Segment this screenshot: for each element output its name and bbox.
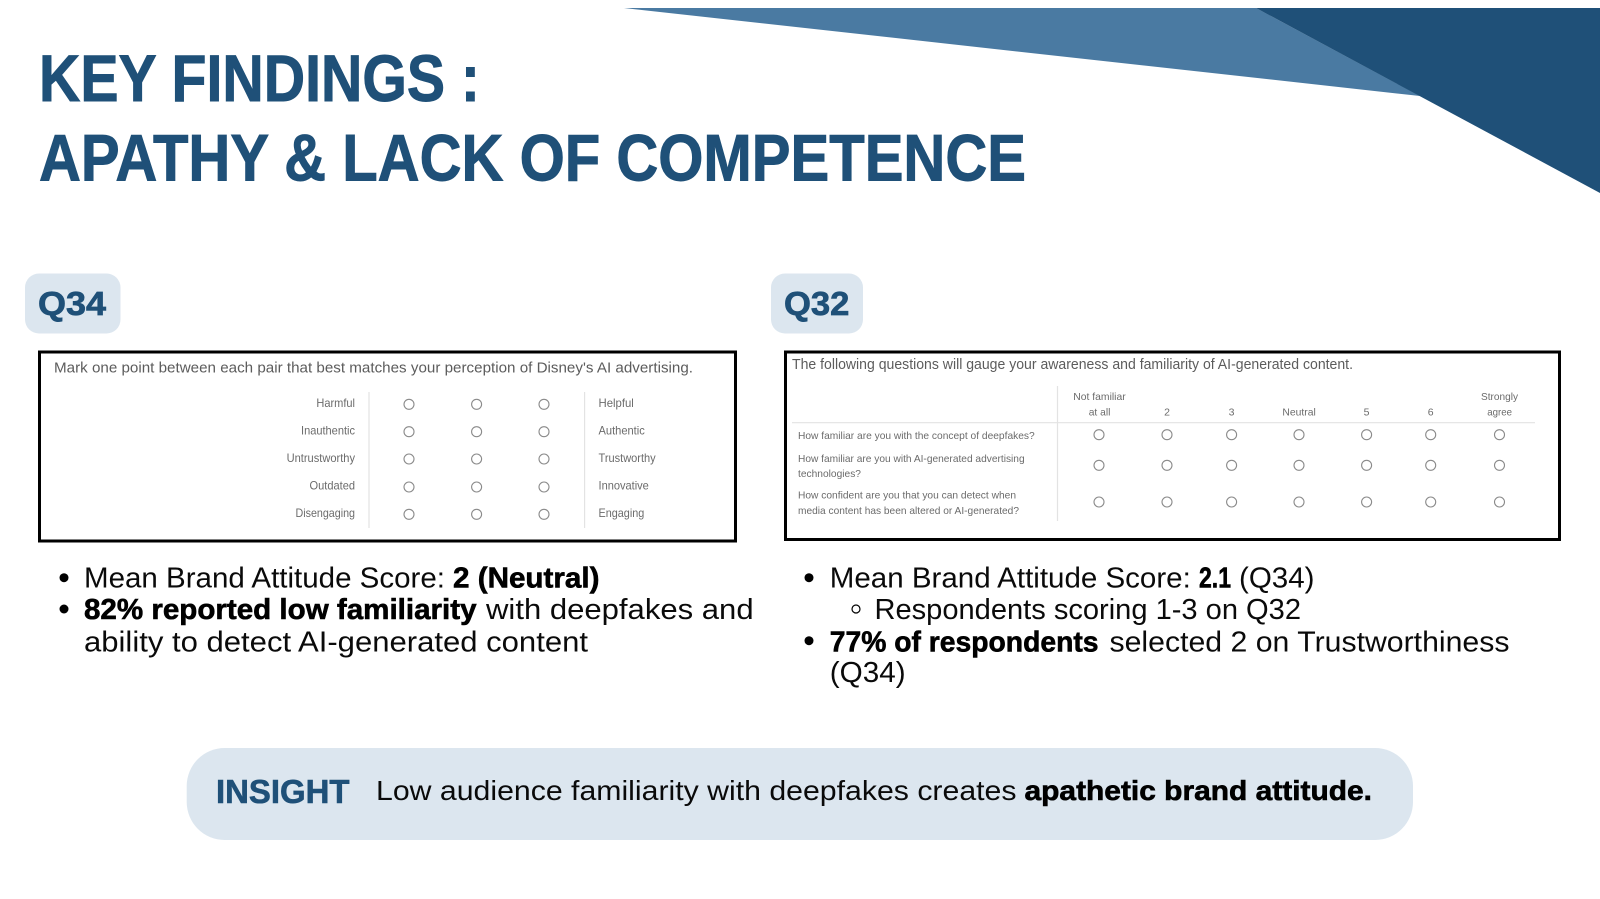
- survey screenshot: Q34 semantic scale: Engaging: [598, 506, 644, 520]
- survey screenshot: Q32 familiarity matrix: Strongly: [1481, 391, 1519, 403]
- findings list: Q32: Mean Brand Attitude Score:: [830, 562, 1191, 594]
- survey screenshot: Q32 familiarity matrix: technologies?: [798, 468, 861, 480]
- survey screenshot: Q32 familiarity matrix: 3: [1229, 407, 1235, 419]
- survey screenshot: Q34 semantic scale: Harmful: [316, 396, 355, 410]
- insight callout: [187, 748, 1413, 840]
- findings list: Q32: 2.1: [1199, 562, 1231, 594]
- survey screenshot: Q32 familiarity matrix: Not familiar: [1073, 391, 1126, 403]
- insight callout: Low audience familiarity with deepfakes creates: [376, 775, 1016, 806]
- survey screenshot: Q34 semantic scale: Authentic: [598, 424, 645, 438]
- survey screenshot: Q34 semantic scale: Outdated: [310, 478, 355, 492]
- survey screenshot: Q32 familiarity matrix: The following questions will gauge your awareness and familiarity of AI-generated content.: [792, 356, 1353, 373]
- survey screenshot: Q34 semantic scale: Trustworthy: [598, 451, 656, 465]
- panel: Q32: [771, 274, 1560, 689]
- survey screenshot: Q32 familiarity matrix: 6: [1428, 407, 1434, 419]
- title: [39, 41, 1026, 194]
- findings list: Q32: selected 2 on Trustworthiness: [1110, 626, 1510, 658]
- findings list: Q34: 82% reported low familiarity: [84, 594, 476, 626]
- findings list: Q32: (Q34): [1239, 562, 1314, 594]
- survey screenshot: Q34 semantic scale: Untrustworthy: [287, 451, 355, 465]
- badge: Q34: [25, 274, 120, 334]
- survey screenshot: Q34 semantic scale: Disengaging: [296, 506, 355, 520]
- findings list: Q34: [60, 562, 754, 658]
- survey screenshot: Q32 familiarity matrix: How confident are you that you can detect when: [798, 490, 1016, 502]
- survey screenshot: Q34 semantic scale: Mark one point between each pair that best matches your perception of Disney's AI advertising.: [54, 360, 693, 377]
- survey screenshot: Q32 familiarity matrix: Neutral: [1282, 407, 1316, 419]
- findings list: Q34: ability to detect AI-generated content: [84, 626, 588, 658]
- decorative corner triangles: [624, 8, 1600, 193]
- survey screenshot: Q32 familiarity matrix: at all: [1089, 407, 1110, 419]
- findings list: Q32: 77% of respondents: [830, 626, 1098, 658]
- survey screenshot: Q34 semantic scale: Helpful: [598, 396, 634, 410]
- findings list: Q32: [804, 562, 1510, 689]
- badge: Q32: [771, 274, 863, 334]
- findings list: Q32: (Q34): [830, 657, 906, 689]
- survey screenshot: Q32 familiarity matrix: media content has been altered or AI-generated?: [798, 505, 1019, 517]
- badge: Q34: Q34: [38, 285, 107, 322]
- survey screenshot: Q34 semantic scale: Innovative: [598, 478, 649, 492]
- survey screenshot: Q32 familiarity matrix: How familiar are you with the concept of deepfakes?: [798, 430, 1035, 442]
- survey screenshot: Q32 familiarity matrix: 2: [1164, 407, 1170, 419]
- insight callout: INSIGHT: [216, 773, 350, 810]
- findings list: Q32: Respondents scoring 1-3 on Q32: [874, 594, 1301, 626]
- survey screenshot: Q32 familiarity matrix: [786, 352, 1560, 540]
- title: APATHY & LACK OF COMPETENCE: [39, 120, 1026, 194]
- survey screenshot: Q32 familiarity matrix: How familiar are you with AI-generated advertising: [798, 453, 1025, 465]
- findings list: Q34: with deepfakes and: [485, 594, 754, 626]
- panel: Q34: [25, 274, 754, 658]
- survey screenshot: Q32 familiarity matrix: agree: [1487, 407, 1512, 419]
- insight callout: apathetic brand attitude.: [1024, 775, 1372, 806]
- findings list: Q34: 2 (Neutral): [453, 562, 600, 594]
- survey screenshot: Q32 familiarity matrix: 5: [1364, 407, 1370, 419]
- findings list: Q34: Mean Brand Attitude Score:: [84, 562, 445, 594]
- survey screenshot: Q34 semantic scale: Inauthentic: [301, 424, 355, 438]
- badge: Q32: Q32: [784, 285, 849, 322]
- survey screenshot: Q34 semantic scale: [40, 352, 736, 541]
- title: KEY FINDINGS :: [39, 41, 480, 115]
